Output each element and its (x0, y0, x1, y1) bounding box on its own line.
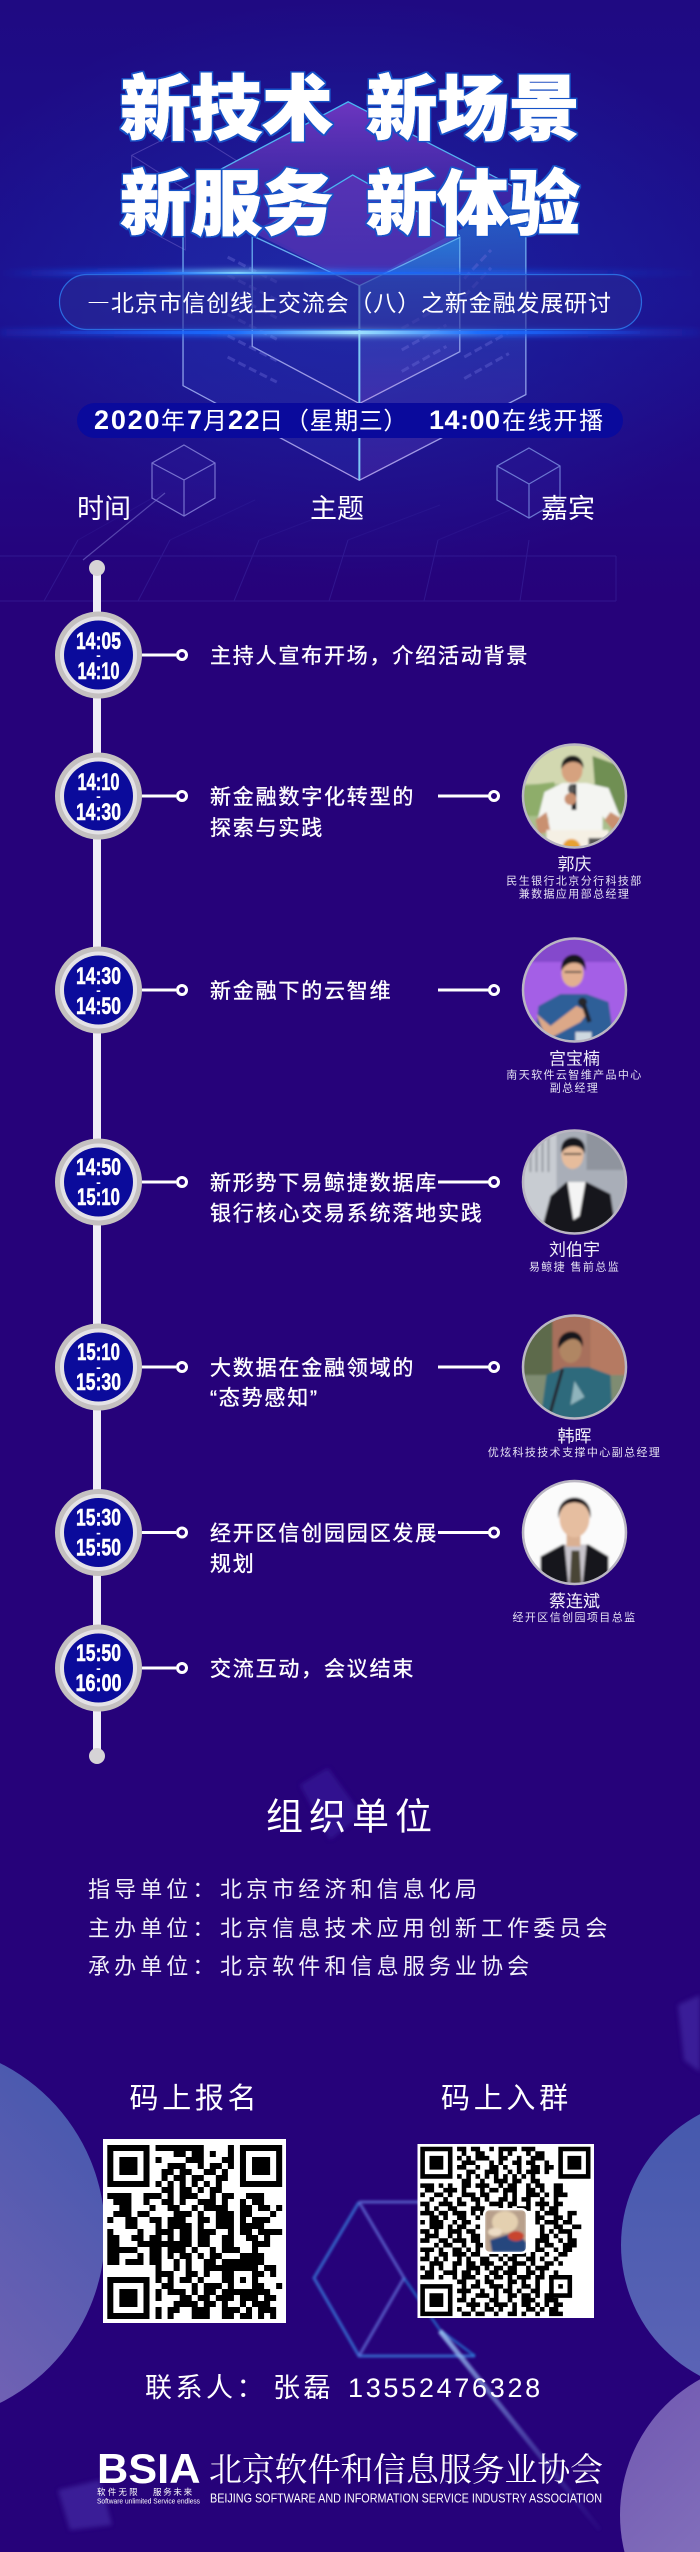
time badge 2: 14:30 (76, 799, 121, 826)
row 5: 15:10-15:30: 大数据在金融领域的 (210, 1357, 415, 1380)
column header: topic: 主题 (310, 487, 364, 526)
organizer list: 北京信息技术应用创新工作委员会 (220, 1916, 612, 1941)
contact line: 13552476328 (348, 2373, 543, 2403)
subtitle pill: —北京市信创线上交流会（八）之新金融发展研讨 (87, 284, 612, 318)
time badge 7 (58, 1627, 140, 1709)
date pill: 22 (228, 405, 261, 435)
title: 新场景 (366, 53, 580, 155)
time badge 4: 15:10 (77, 1184, 120, 1211)
time badge 6: - (96, 1524, 101, 1540)
title: 新服务 (120, 148, 333, 250)
row 5: 15:10-15:30: 韩晖 (558, 1427, 592, 1446)
title (120, 53, 580, 250)
row 6: 15:30-15:50: 蔡连斌 (549, 1592, 600, 1611)
time badge 6: 15:30 (76, 1504, 121, 1532)
date pill: （星期三） (285, 401, 408, 436)
time badge 5: 15:30 (76, 1369, 121, 1396)
row 4: 14:50-15:10: 易鲸捷 售前总监 (529, 1260, 620, 1274)
row 2: 14:10-14:30: 探索与实践 (210, 817, 324, 840)
row 4: 14:50-15:10: 银行核心交易系统落地实践 (210, 1202, 484, 1226)
background: hexagon outline (314, 2202, 600, 2530)
time badge 1: 14:10 (78, 658, 120, 685)
date pill: 14:00 (429, 405, 501, 435)
date pill: 7 (187, 405, 202, 435)
BSIA logo: 服务未来 (153, 2486, 194, 2498)
row 4: 14:50-15:10: 新形势下易鲸捷数据库 (210, 1172, 438, 1195)
time badge 7: 15:50 (76, 1640, 121, 1667)
date pill: 在线开播 (502, 401, 605, 436)
small back cube (132, 129, 237, 250)
time badge 4: 14:50 (76, 1154, 121, 1181)
organizer list: 主办单位： (88, 1916, 219, 1941)
time badge 2: 14:10 (78, 769, 120, 796)
time badge 6 (58, 1492, 140, 1574)
time badge 5: 15:10 (77, 1339, 120, 1366)
background: large circles (0, 2043, 700, 2552)
photo: Cai Lianbin (522, 1480, 626, 1584)
row 6: 15:30-15:50 (58, 1480, 636, 1624)
row 1: 14:05-14:10 (58, 614, 529, 696)
time badge 3 (58, 949, 140, 1031)
time badge 3: - (96, 982, 101, 998)
row 4: 14:50-15:10: 刘伯宇 (549, 1240, 600, 1260)
organizer list: 指导单位： (88, 1877, 219, 1902)
row 2: 14:10-14:30: 民生银行北京分行科技部 (506, 874, 643, 888)
row 5: 15:10-15:30 (58, 1315, 661, 1459)
row 2: 14:10-14:30 (58, 744, 643, 900)
row 2: 14:10-14:30: 郭庆 (558, 855, 592, 874)
time badge 5: - (96, 1359, 101, 1375)
organizer list: 北京市经济和信息化局 (220, 1877, 481, 1902)
BSIA logo: BSIA (97, 2445, 200, 2492)
heading: group QR: 码上入群 (441, 2075, 572, 2117)
column header: time: 时间 (77, 487, 131, 526)
organizer list: 承办单位： (88, 1954, 219, 1979)
QR code: group chat (418, 2144, 594, 2318)
subtitle pill (60, 274, 642, 330)
time badge 1: 14:05 (76, 628, 121, 655)
QR code: registration (103, 2139, 286, 2323)
connector 1 (142, 654, 176, 656)
time badge 6: 15:50 (76, 1534, 121, 1562)
BSIA logo: BEIJING SOFTWARE AND INFORMATION SERVICE INDUSTRY ASSOCIATION (210, 2490, 602, 2506)
time badge 5 (58, 1326, 140, 1408)
time badge 4 (58, 1141, 140, 1223)
row 2: 14:10-14:30: 兼数据应用部总经理 (519, 886, 630, 900)
title: 新技术 (120, 53, 333, 155)
date pill: 月 (203, 401, 227, 436)
hero cube illustration (132, 102, 526, 480)
timeline spine (89, 560, 105, 1764)
small cube right (497, 448, 560, 518)
contact line (145, 2366, 543, 2405)
BSIA logo: 软件无限 (97, 2486, 140, 2498)
contact line: 联系人： (145, 2366, 267, 2405)
glow band bottom (0, 329, 700, 336)
row 3: 14:30-14:50 (58, 938, 643, 1094)
row 6: 15:30-15:50: 规划 (210, 1553, 256, 1576)
glow band top (0, 270, 700, 276)
photo: Liu Boyu (522, 1130, 626, 1234)
time badge 1 (58, 614, 140, 696)
row 3: 14:30-14:50: 南天软件云智维产品中心 (506, 1068, 643, 1082)
time badge 3: 14:30 (76, 963, 121, 990)
time badge 7: 16:00 (76, 1670, 122, 1697)
contact line: 张磊 (273, 2366, 334, 2405)
date pill: 2020 (94, 405, 161, 435)
row 6: 15:30-15:50: 经开区信创园园区发展 (210, 1522, 438, 1546)
photo: Gong Baonan (522, 938, 626, 1042)
column header: guests: 嘉宾 (541, 487, 595, 526)
date pill (77, 401, 623, 438)
perspective grid background (0, 492, 616, 601)
QR centre avatar (483, 2208, 528, 2254)
photo: Guo Qing (522, 744, 626, 848)
time badge 7: - (96, 1660, 101, 1676)
title: 新体验 (366, 148, 580, 250)
photo: Han Hui (522, 1315, 626, 1419)
row 5: 15:10-15:30: “态势感知” (210, 1387, 319, 1410)
organizer list (88, 1877, 612, 1979)
BSIA logo: Software unlimited Service endless (97, 2496, 200, 2506)
small cube left (83, 445, 215, 560)
heading: register QR: 码上报名 (130, 2075, 260, 2117)
date pill: 日 (259, 401, 283, 436)
time badge 4: - (96, 1174, 101, 1190)
row 2: 14:10-14:30: 新金融数字化转型的 (210, 786, 415, 809)
date pill: 年 (161, 401, 185, 436)
background: blurred cuboids (58, 1768, 700, 2530)
row 3: 14:30-14:50: 副总经理 (550, 1080, 599, 1094)
row 6: 15:30-15:50: 经开区信创园项目总监 (512, 1610, 636, 1624)
BSIA logo: 北京软件和信息服务业协会 (209, 2444, 603, 2491)
row 7: 15:50-16:00 (58, 1627, 415, 1709)
row 5: 15:10-15:30: 优炫科技技术支撑中心副总经理 (488, 1445, 661, 1459)
heading: organizers: 组织单位 (266, 1786, 438, 1840)
organizer list: 北京软件和信息服务业协会 (220, 1954, 533, 1979)
row 1: 14:05-14:10: 主持人宣布开场，介绍活动背景 (210, 645, 529, 668)
time badge 2 (58, 755, 140, 837)
row 4: 14:50-15:10 (58, 1130, 626, 1274)
row 7: 15:50-16:00: 交流互动，会议结束 (210, 1658, 415, 1681)
BSIA logo (97, 2444, 603, 2506)
time badge 3: 14:50 (76, 993, 121, 1020)
time badge 2: - (96, 788, 101, 804)
row 3: 14:30-14:50: 新金融下的云智维 (210, 980, 392, 1003)
row 3: 14:30-14:50: 宫宝楠 (549, 1050, 600, 1068)
time badge 1: - (96, 647, 101, 663)
